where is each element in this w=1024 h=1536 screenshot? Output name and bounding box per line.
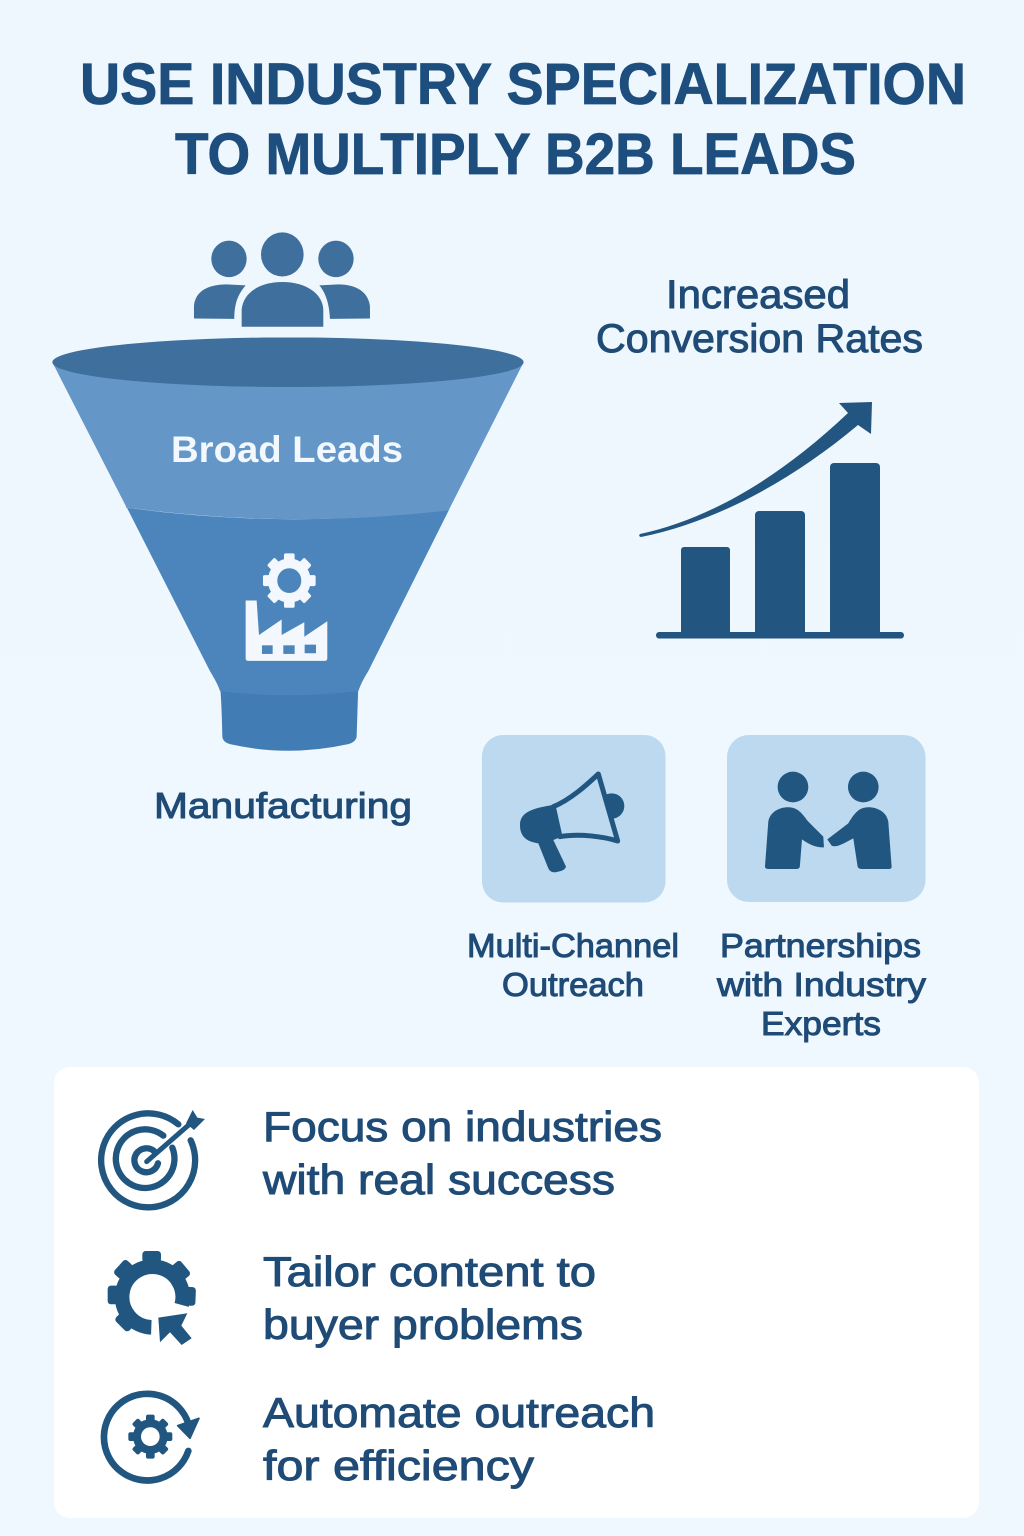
icon: audience group (194, 232, 370, 327)
icon: gear (263, 553, 316, 608)
text: tailor content: buyer problems (263, 1301, 583, 1348)
text: focus on industries (262, 1103, 662, 1203)
heading: increased conversion rates: Increased (666, 273, 850, 317)
growth arrow (639, 402, 872, 537)
funnel lower band (126, 506, 449, 695)
text: focus on industries: Focus on industries (263, 1103, 662, 1150)
title: TO MULTIPLY B2B LEADS (175, 122, 856, 187)
tile: partnerships (727, 735, 926, 902)
funnel opening (52, 337, 524, 387)
title (80, 52, 966, 187)
text: automate outreach: for efficiency (263, 1442, 534, 1489)
text: focus on industries: with real success (262, 1156, 615, 1203)
chart bars (681, 463, 880, 637)
text: tailor content (263, 1248, 596, 1348)
chart baseline (656, 632, 904, 638)
funnel (52, 337, 524, 751)
panel: tactics (54, 1067, 979, 1518)
label: multi-channel outreach: Outreach (502, 966, 644, 1003)
icon: target (101, 1110, 205, 1207)
label: partnerships with industry experts: Experts (761, 1005, 881, 1042)
label: partnerships with industry experts: Partnerships (720, 927, 921, 964)
label: partnerships with industry experts: with Industry (716, 966, 927, 1003)
funnel label: manufacturing: Manufacturing (154, 785, 412, 826)
funnel label: broad leads: Broad Leads (171, 429, 403, 470)
text: automate outreach (263, 1389, 655, 1489)
icon: handshake people (765, 772, 892, 869)
heading: increased conversion rates (596, 273, 923, 361)
title: USE INDUSTRY SPECIALIZATION (80, 52, 966, 117)
funnel upper band (53, 363, 523, 519)
label: partnerships with industry experts (716, 927, 927, 1042)
icon: megaphone (520, 774, 624, 872)
funnel neck (220, 685, 358, 751)
label: multi-channel outreach: Multi-Channel (467, 927, 679, 964)
icon: factory (246, 601, 327, 661)
text: automate outreach: Automate outreach (263, 1389, 655, 1436)
tile: multi-channel outreach (482, 735, 666, 902)
text: tailor content: Tailor content to (263, 1248, 596, 1295)
icon: gear with cursor (108, 1251, 196, 1345)
heading: increased conversion rates: Conversion Rates (596, 317, 923, 361)
bar chart: rising conversions (639, 402, 904, 638)
label: multi-channel outreach (467, 927, 679, 1003)
icon: automation cycle (104, 1394, 199, 1480)
